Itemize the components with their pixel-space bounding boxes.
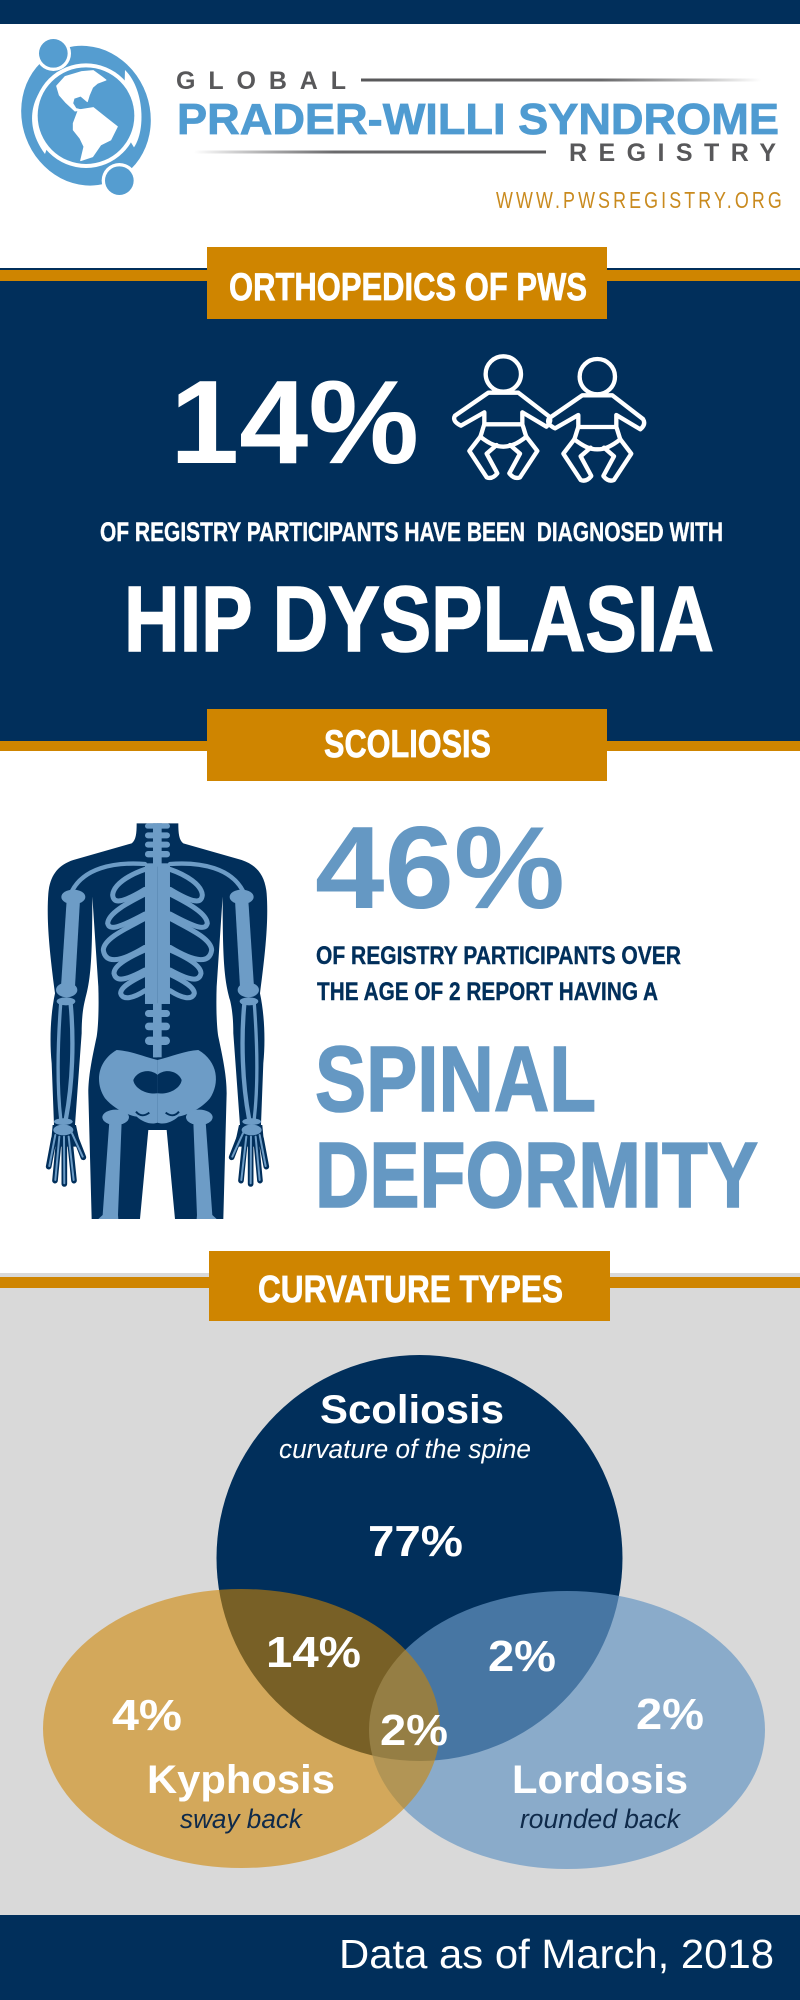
value: 77%: 77% <box>368 1517 463 1566</box>
label: scoliosis: Scoliosis <box>320 1388 504 1432</box>
footer text: data date: Data as of March, 2018 <box>339 1931 774 1977</box>
top navy bar <box>0 0 800 24</box>
logo word: PRADER-WILLI SYNDROME: PRADER-WILLI SYNDROME <box>177 95 779 144</box>
ellipse: kyphosis <box>43 1589 440 1868</box>
icon: globe logo <box>2 27 170 204</box>
value: 2% right: 2% <box>636 1690 704 1739</box>
footer bar <box>0 1915 800 2000</box>
panel: scoliosis <box>0 709 800 1227</box>
heading: curvature types: CURVATURE TYPES <box>258 1269 563 1311</box>
circle: scoliosis <box>216 1355 622 1761</box>
text: participants over age 2 <box>316 942 681 1006</box>
stat: 14%: 14% <box>170 356 419 489</box>
heading: scoliosis: SCOLIOSIS <box>324 723 491 766</box>
website url: WWW.PWSREGISTRY.ORG <box>496 188 782 214</box>
value: 2%: 2% <box>488 1632 556 1681</box>
heading: orthopedics of PWS: ORTHOPEDICS OF PWS <box>229 266 587 309</box>
venn diagram <box>43 1355 765 1869</box>
logo word: REGISTRY: REGISTRY <box>569 139 776 167</box>
panel: curvature types <box>0 1251 800 1915</box>
icon: skeleton torso <box>48 823 267 1219</box>
text: participants over age 2: THE AGE OF 2 REPORT HAVING A <box>317 978 658 1006</box>
headline: spinal deformity: SPINAL <box>315 1027 596 1131</box>
stat: 46%: 46% <box>315 802 565 933</box>
heading: orthopedics of PWS <box>207 247 607 319</box>
heading: scoliosis <box>207 709 607 781</box>
headline: spinal deformity <box>315 1027 758 1227</box>
header: registry logo <box>2 27 782 214</box>
icon: two babies <box>454 356 644 481</box>
heading: curvature types <box>209 1251 610 1321</box>
text: participants over age 2: OF REGISTRY PARTICIPANTS OVER <box>316 942 681 970</box>
panel: hip dysplasia <box>0 247 800 741</box>
label: sway back: sway back <box>180 1804 303 1834</box>
value: 14%: 14% <box>266 1628 361 1677</box>
value: 4%: 4% <box>112 1691 182 1740</box>
value: 2% center: 2% <box>380 1706 448 1755</box>
label: curvature of the spine: curvature of the spine <box>279 1434 531 1464</box>
label: lordosis: Lordosis <box>512 1758 688 1802</box>
label: rounded back: rounded back <box>520 1804 681 1834</box>
ellipse: lordosis <box>369 1591 765 1869</box>
label: kyphosis: Kyphosis <box>147 1758 335 1802</box>
logo word: GLOBAL: GLOBAL <box>176 67 346 95</box>
